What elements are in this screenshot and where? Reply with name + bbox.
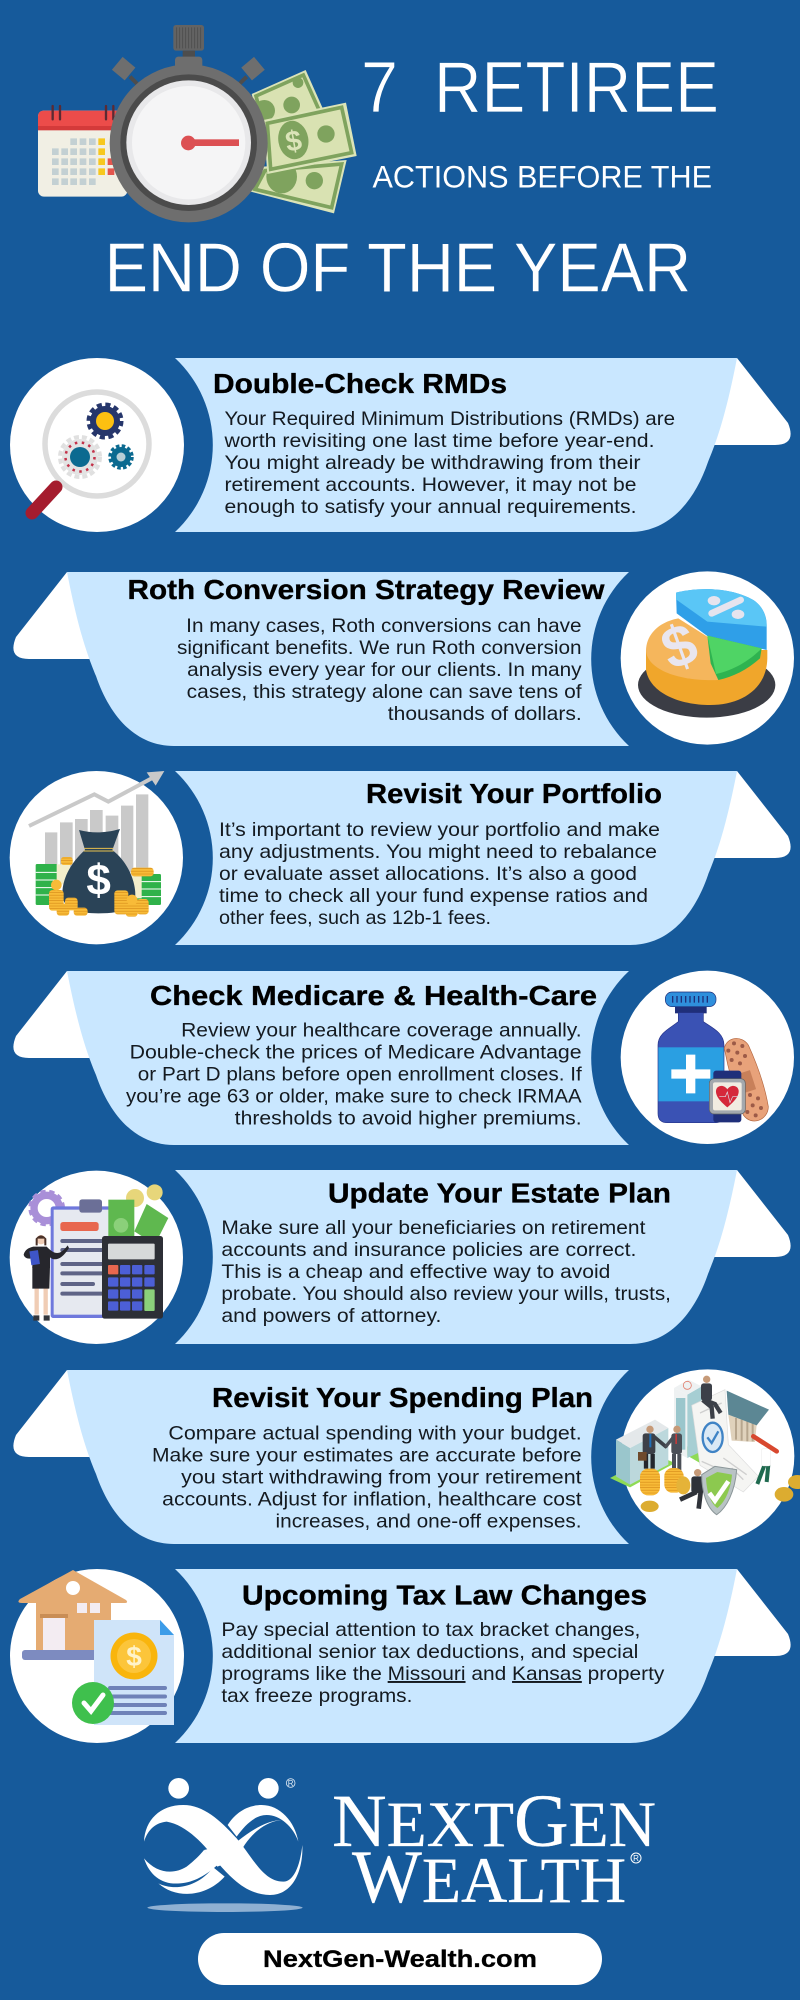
body text: thousands of dollars. [388,703,582,725]
body text [219,819,660,929]
icon: money bag with chart: $ [86,856,111,905]
panel: Roth conversion strategy review [13,571,794,746]
website address: NextGen-Wealth.com [263,1946,537,1973]
body text: enough to satisfy your annual requirements. [224,496,636,518]
body text: In many cases, Roth conversions can have [186,615,582,637]
body text: This is a cheap and effective way to avoid [221,1261,610,1283]
icon: clipboard, calculator and advisor [10,1171,183,1344]
body text: thresholds to avoid higher premiums. [235,1108,582,1130]
icon: house and tax document [10,1569,184,1743]
heading: Double-Check RMDs [213,368,507,399]
title line: actions before the: ACTIONS BEFORE THE [372,159,712,195]
header illustration: stopwatch, calendar and money [38,25,357,222]
body text: time to check all your fund expense ratios and [219,885,648,907]
title line: 7 RETIREE: 7 [361,48,398,128]
heading: Roth Conversion Strategy Review [128,574,605,605]
body text: Review your healthcare coverage annually. [181,1020,582,1042]
website button [198,1933,602,1985]
logo wordmark [332,1780,656,1919]
body text: programs like the Missouri and Kansas property [221,1663,665,1685]
heading: Check Medicare & Health-Care [150,980,597,1011]
coin stacks [640,1468,800,1512]
registered mark: R [633,1854,639,1863]
body text [152,1422,582,1532]
body text: tax freeze programs. [221,1685,412,1707]
icon: calendar [38,106,127,197]
body text: It’s important to review your portfolio and make [219,819,660,841]
body text: Double-check the prices of Medicare Advantage [130,1042,582,1064]
icon: stopwatch [110,25,268,222]
title [105,48,719,307]
panel: upcoming tax law changes [10,1569,791,1743]
body text: You might already be withdrawing from their [224,452,641,474]
body text: cases, this strategy alone can save tens of [187,681,582,703]
body text: increases, and one-off expenses. [276,1510,582,1532]
icon: banknotes [251,70,357,213]
registered mark [286,1779,295,1788]
panel: update your estate plan [10,1170,791,1344]
icon: house and tax document: $ [126,1641,142,1672]
figure: running man [680,1469,704,1509]
icon: medicine bottle, bandage and watch [621,971,794,1144]
body text: accounts. Adjust for inflation, healthcare cost [162,1488,582,1510]
body text: Make sure your estimates are accurate before [152,1444,582,1466]
body text: Compare actual spending with your budget. [168,1422,582,1444]
figures: two businessmen shaking hands on coins [638,1426,682,1471]
icon: pie chart: $ [653,611,706,683]
icon: banknotes: $ [283,124,304,159]
body text [177,615,582,725]
panel: double-check RMDs [10,358,791,532]
body text: Pay special attention to tax bracket changes, [221,1619,640,1641]
body text [126,1020,582,1130]
panel: revisit your spending plan [13,1369,800,1544]
logo mark: infinity with two figures [144,1778,303,1912]
body text: and powers of attorney. [221,1305,441,1327]
body text: Make sure all your beneficiaries on retirement [221,1217,646,1239]
body text: Your Required Minimum Distributions (RMDs) are [224,408,675,430]
body text: significant benefits. We run Roth conversion [177,637,582,659]
heading: Revisit Your Spending Plan [212,1382,593,1413]
title line: 7 RETIREE: RETIREE [434,48,719,128]
registered mark: R [288,1779,294,1788]
icon: money bag with chart [10,771,183,944]
figure: seated man on tower [701,1376,721,1419]
body text [223,408,675,518]
icon: pie chart [621,571,794,745]
title line: end of the year: END OF THE YEAR [105,229,691,307]
logo: NextGen Wealth [144,1778,656,1919]
panel: revisit your portfolio [10,771,791,945]
body text: retirement accounts. However, it may not be [224,474,636,496]
icon: shield with check [702,1466,737,1515]
heading: Upcoming Tax Law Changes [242,1580,647,1611]
logo wordmark: WEALTH [352,1836,626,1919]
logo wordmark: NEXTGEN [332,1780,656,1863]
heading: Update Your Estate Plan [328,1178,671,1209]
body text: probate. You should also review your wills, trusts, [221,1283,671,1305]
body text: or Part D plans before open enrollment closes. If [138,1064,582,1086]
icon: magnifier with gears [10,358,184,532]
panel: check Medicare and health-care [13,971,794,1145]
body text: other fees, such as 12b-1 fees. [219,907,491,929]
body text [221,1619,665,1707]
icon: isometric business and finance scene [610,1369,800,1543]
figure: woman with giant pencil [753,1436,777,1484]
heading: Revisit Your Portfolio [366,778,662,809]
body text: or evaluate asset allocations. It’s also a good [219,863,637,885]
registered mark [631,1853,641,1863]
body text: you start withdrawing from your retirement [181,1466,582,1488]
body text: worth revisiting one last time before year-end. [223,430,654,452]
body text: analysis every year for our clients. In many [187,659,582,681]
body text: additional senior tax deductions, and special [221,1641,638,1663]
body text: you’re age 63 or older, make sure to check IRMAA [126,1086,582,1108]
body text: any adjustments. You might need to rebalance [219,841,657,863]
body text [221,1217,671,1327]
body text: accounts and insurance policies are correct. [221,1239,636,1261]
